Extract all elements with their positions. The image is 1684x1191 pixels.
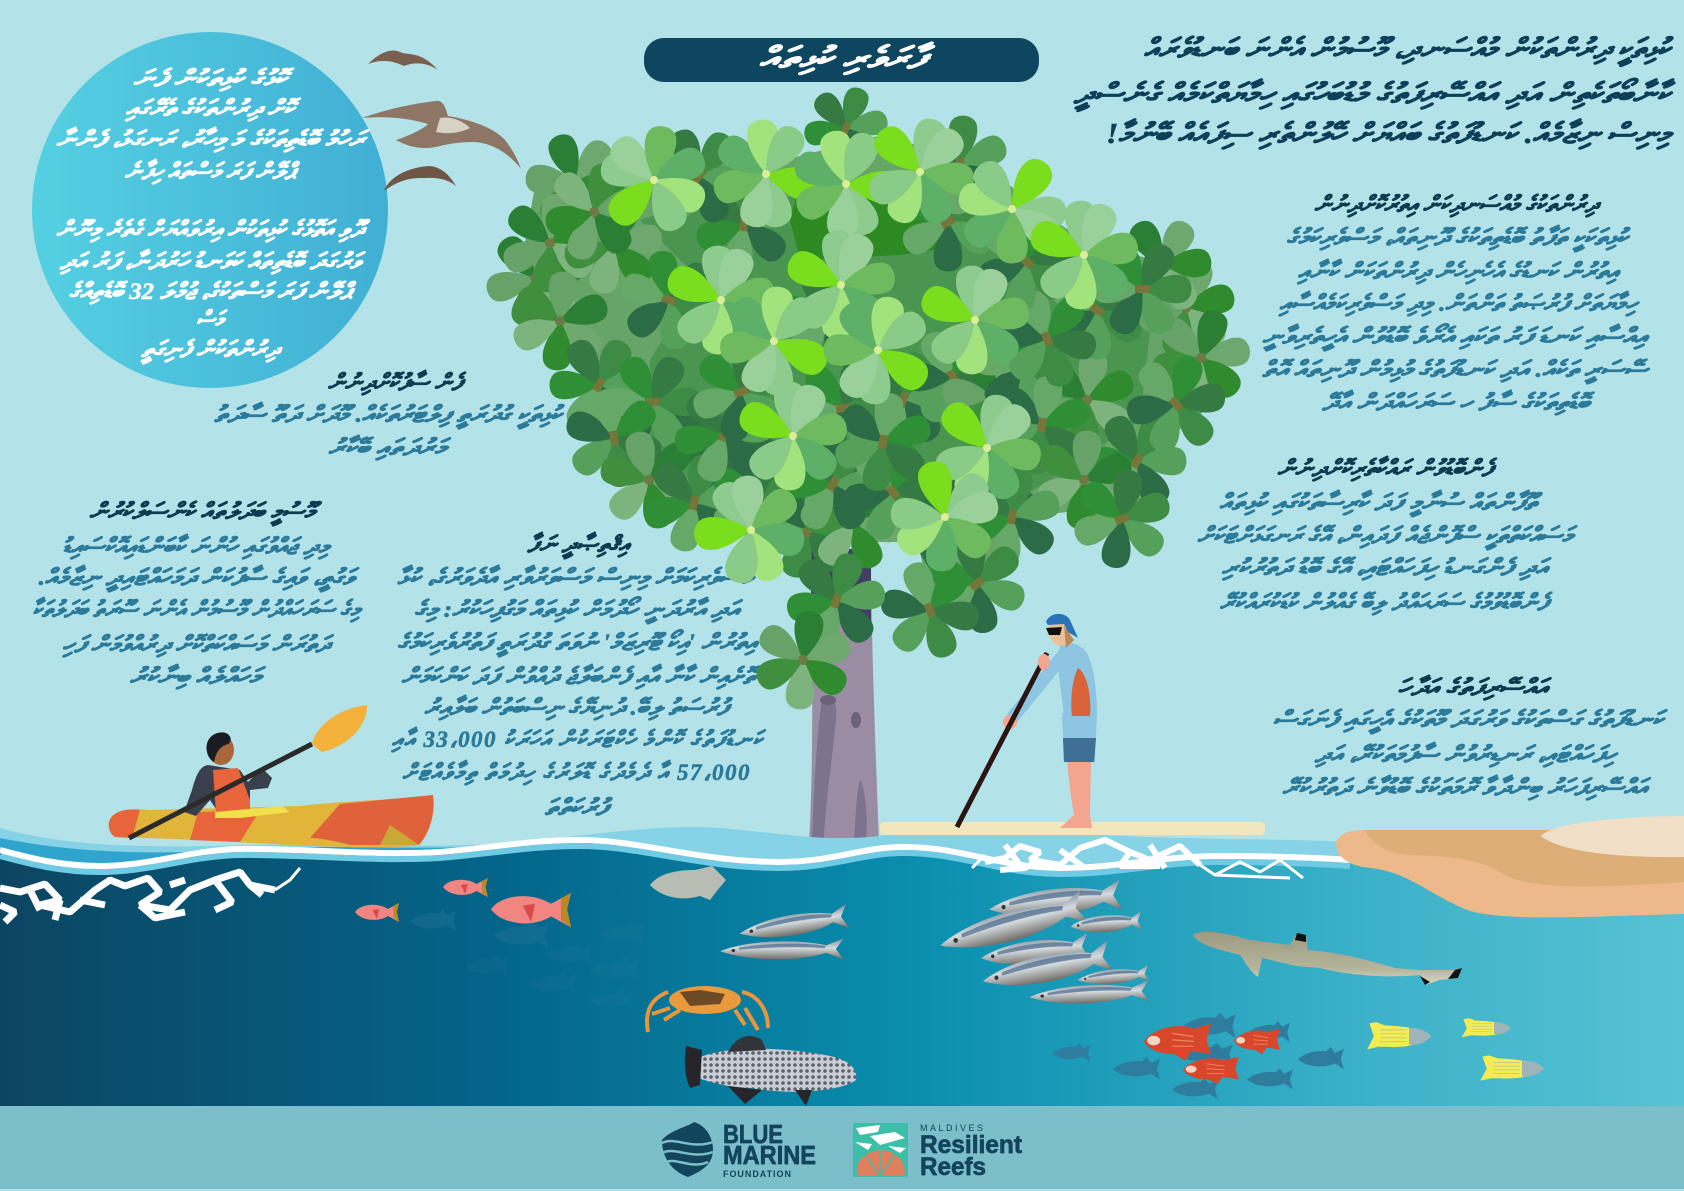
info circle: ކޮށް ދިރުންތަކުގެ ތެރޭގައި — [124, 96, 301, 122]
intro text: މިނިސް ނިޒާމެއް. ކަނޑުފަތުގެ ބައްޔަށް ހޭލުންތެރި ސިފައެއް ބޭނުމާ! — [1106, 118, 1675, 150]
icon: birds — [362, 50, 521, 191]
kayak paddle — [129, 705, 367, 838]
section: biodiversity text: ސޭސަރީ ތަކެއް. އަދި ކަނޑުފަތުގެ މުޅިމުން ދޫނިތައް އޮތް — [1261, 357, 1651, 385]
sea life — [355, 866, 1544, 1106]
section: economic benefit text: އިތުރުން 'އިކޯ ޓޫރިޒަމް' ނުވަތަ ގުދުރަތީ ފަތުރުވެރިކަމުގެ — [398, 629, 760, 658]
info circle: ކޮޅުގެ ކުޅިތަކުން ފެނަ — [134, 66, 295, 92]
paddleboarder — [957, 614, 1097, 828]
section: flood protection text: ތޫފާންތައް ސުނާމީ ފަދަ ކާރިސާތަކުގައި ކުޅިތައް — [1220, 489, 1544, 518]
section: biodiversity text: އިތުރުން ކަނޑުގެ އެހެނިހެން ދިރުންތަކަން ކާނާއި — [1296, 258, 1621, 285]
section: climate text — [32, 499, 363, 690]
pale band below crest — [0, 846, 1350, 874]
section: economic benefit text: ކަނޑުފަތުގެ ކޮންމެ ހެކްޓަރަކުން އަހަރަކު 33،000 އާއި — [390, 726, 767, 753]
section: flood protection text: މަސައްކަތްތަކީ ސްފޮންޖެއް ފަދައިން، އޭގެ ރަނގަޅަށްޓަކަށް — [1198, 523, 1578, 551]
light wave band — [0, 827, 1350, 900]
section: water purification text — [213, 369, 566, 461]
info circle — [32, 32, 388, 388]
grouper — [685, 1036, 856, 1106]
info circle: ވަރުގަދަ ބޮޑެތިތައް ކަވަނޑު ހަރުދަނާ، ފަރު އަދި — [59, 248, 366, 275]
reef emblem — [853, 1123, 908, 1177]
info circle: ދިރުންތަކުން ފެނިގަތީ — [140, 337, 283, 365]
logo: Maldives Resilient Reefs — [853, 1123, 1023, 1181]
mid wave band — [0, 838, 640, 870]
section: economic benefit text: އިޤްތިޞާދީ ނަފާ — [526, 531, 632, 560]
section: flood protection text: އަދި ފެންގަނޑު ހިފަހައްޓައި، އޭގެ ބޮޑު ދަތުރުކުރި — [1221, 555, 1552, 581]
red squirrelfish — [1144, 1024, 1280, 1084]
logo: Maldives Resilient Reefs: Resilient — [920, 1131, 1023, 1159]
blue fish school — [1052, 1013, 1344, 1099]
section: biodiversity text: އިއްސާއި ކަނޑަ ފަރު ތަކައި އެރޯވެ ބޮޑުވުން އެހީތެރިވާނީ — [1262, 323, 1650, 352]
crab — [647, 986, 768, 1032]
title pill: ފާރަވެރި ކުޅިތައް — [760, 41, 936, 75]
section: reef link text: އައްސޭރިފަތުގެ އަދާހަ — [1398, 674, 1553, 701]
logo: Blue Marine Foundation: FOUNDATION — [723, 1169, 791, 1179]
yellow striped fish — [1367, 1018, 1544, 1081]
kayak — [109, 705, 434, 847]
info circle: ދޫވި އަތޮޅުގެ ކުޅިތަކުން އިރުވައްޔަށް ގެތެރެ މިނޫން — [56, 217, 371, 243]
section: flood protection text: ފެންބޮޑުވުން ރައްކާތެރިކޮށްދިނުން — [1278, 455, 1498, 482]
logo: Blue Marine Foundation: MARINE — [723, 1140, 816, 1170]
section: reef link text: ކަނޑުފަތުގެ ގަސްތަކުގެ ވަރުގަދަ މޫތަކުގެ އެހީގައި ފެނަގަސް — [1273, 707, 1668, 735]
section: economic benefit text: އަދި އާރުދަނީ ހޯދުމަށް ކުޅިތައް މަގުފިހަކުރު: މިގެ — [414, 596, 744, 625]
logo: Maldives Resilient Reefs: MALDIVES — [920, 1123, 983, 1133]
section: biodiversity text: ހިމާޔަތަށް ފުރުޞަތު ތަންތަން. މިދި މަސްވެރިކަމެއްސާއި — [1278, 290, 1641, 317]
section: water purification text: މަރުދަތައި ބޭކާރު — [328, 434, 452, 461]
shadow fish — [410, 909, 643, 1010]
sup paddle — [957, 653, 1047, 827]
barracuda school — [720, 879, 1149, 1005]
tree — [471, 74, 1259, 843]
water — [0, 705, 1684, 1106]
sea body — [0, 840, 1684, 1106]
white foam left — [0, 868, 300, 922]
canopy leaf clusters — [471, 74, 1259, 725]
paddle board — [880, 822, 1265, 835]
white foam right — [972, 840, 1303, 878]
intro text: ކުޅިތަކީ ދިރުންތަކުން މުއްސަނދި، މޫސުމުން އެންނަ ބަނޑުވެރައް — [1144, 34, 1674, 67]
tree trunk — [809, 549, 879, 843]
section: flood protection text — [1198, 455, 1578, 616]
logo: Blue Marine Foundation — [662, 1119, 816, 1179]
section: economic benefit text: 57،000 އާ ދެމެދުގެ ޑޮލަރުގެ ހިދުމަތް ތިމާވެއްޓަށް — [403, 759, 750, 786]
white wave crest — [0, 840, 1350, 868]
section: biodiversity text: ދިރުންތަކުގެ މުއްސަނދިކަން އިތުރުކޮށްދިނުން — [1314, 192, 1602, 218]
section: climate text: މިދި ޖައްވުގައި ހުންނަ ކާބަންޑައިއޮކްސައިޑު — [62, 533, 332, 560]
section: flood protection text: ފެންބޮޑުވުމުގެ ސަރަޙައްދު ލިބޭ ގެއްލުން ކުޑަކުރައްކުރޭ — [1220, 590, 1553, 616]
section: economic benefit text: ތޮށެއިން ކާނާ އާއި ފެންބަލާޖެ ދުއްވުން ފަދަ ކަންކަމަން — [402, 663, 761, 690]
section: water purification text: ކުޅިތަކީ ގުދުރަތީ ފިލްޓަރުތަކެއް. މޫދަށް ދަތޫ ސާދަތު — [213, 401, 566, 430]
logo: Maldives Resilient Reefs: Reefs — [920, 1153, 986, 1181]
section: climate text: މަހައްލެއް ބިނާކުރު — [130, 663, 267, 690]
blacktip shark — [1193, 932, 1462, 985]
info circle: ރަހުމު ބޮޑެތިތަކުގެ މަ މިހާރު، ރަނގަޅު، ފެންނާ — [56, 126, 370, 153]
section: economic benefit text — [390, 531, 767, 820]
grey fish — [650, 866, 726, 900]
blue marine emblem — [662, 1122, 713, 1177]
section: biodiversity text — [1261, 192, 1651, 416]
section: economic benefit text: ފުރުސަތު ލިބޭ. ދުނިޔޭގެ ނިސްބަތުން ބަލާއިރު — [424, 694, 734, 721]
title pill — [644, 38, 1039, 82]
intro text — [1073, 34, 1676, 150]
canopy mass — [525, 136, 1226, 591]
section: biodiversity text: ބޮޑެތިތަކުގެ ސާފު ހ ސަރަހައްދަން އާދޭ — [1321, 389, 1595, 416]
intro text: ކާނާބޯތަކެތިން އަދި އައްސޭރިފަތުގެ މުޑުބަހުގައި ހިމާޔަތްކަމެއް ގެނެސްދީ — [1073, 77, 1676, 112]
beach — [1336, 816, 1684, 917]
section: climate text: ދަތުރަން މަސައްކަތްކޮށް ދިރުއްވުމަން ފަހި — [61, 632, 335, 658]
info circle: ޕްލޭން ފަރަ މަސްތައް ހިފާނެ — [125, 158, 300, 185]
section: economic benefit text: ފުރުކަތްތަ — [544, 795, 614, 820]
section: water purification text: ފެން ސާފުކޮށްދިނުން — [328, 369, 467, 396]
info circle: މަސް — [196, 307, 228, 332]
section: reef link text: ހިފަހައްޓައި، ރަނޑިރުވުން ސާފުމަތަކުރޭ، އަދި — [1314, 741, 1619, 768]
section: climate text: މިގެ ސަރަހައްދުން މޫސުމުން އެންނަ ސޫރަތު ބަދަލުތަކާ — [32, 596, 363, 623]
section: reef link text — [1273, 674, 1668, 801]
section: climate text: ވަގުތީ، ވައިގެ ސާފުކަން ދަމަހައްޓައިދީ ނިޒާމެއް. — [38, 564, 360, 593]
logo: Blue Marine Foundation: BLUE — [723, 1119, 783, 1149]
section: biodiversity text: ކުޅިތަކަކީ ތަފާތު ބޮޑެތިތަކުގެ ދޫނިތައް، މަސްވެރިކަމުގެ — [1286, 224, 1632, 253]
red snappers — [355, 878, 571, 927]
footer band — [0, 1106, 1684, 1189]
section: climate text: މޫސުމީ ބަދަލުތައް ކެންސަލްކުރުން — [90, 499, 323, 527]
info circle: ޕްލޭން ފަރަ މަސްތަކުގެ، ޖުމްލަ 32 ބޮޑެތިއްގެ — [69, 279, 356, 305]
section: economic benefit text: މަސްވެރިކަމަށް މިނިސް މަސްވަރުވާރި އާދެވަރުގެ، ކުޅާ — [396, 564, 758, 591]
section: reef link text: އައްސޭރިފަހަރު ބިންދާވާ ރޮމަތަކުގެ ބޮޑުވާނެ ދަތުރުކުރޭ — [1282, 774, 1652, 801]
